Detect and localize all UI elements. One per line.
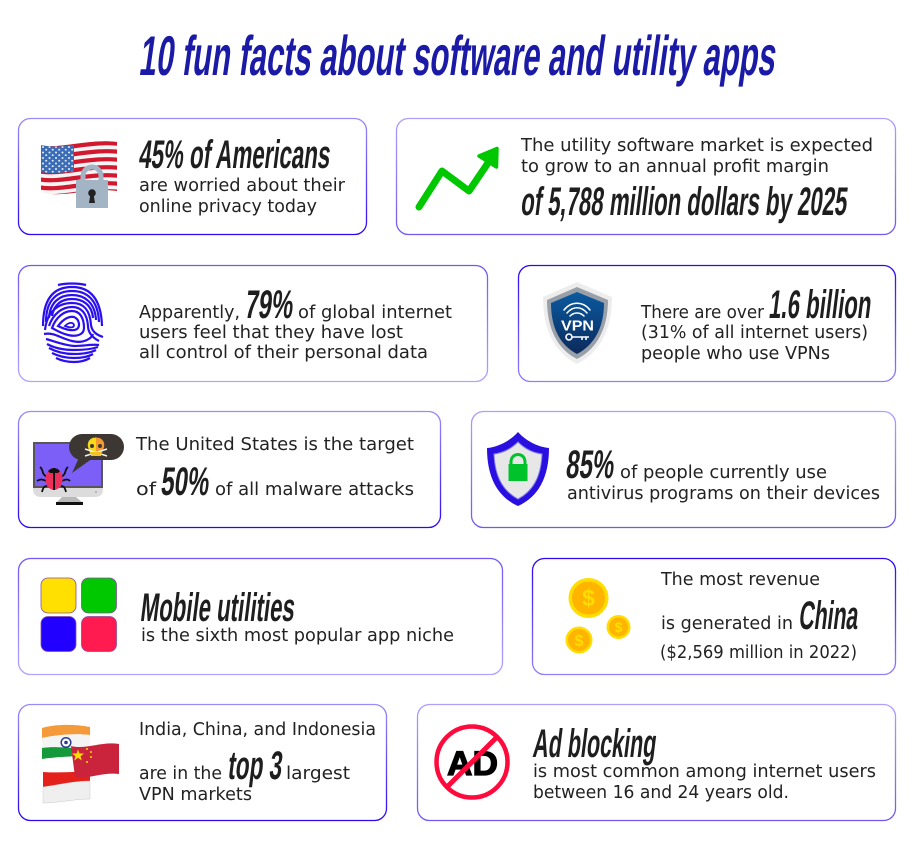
icon: gold coins bbox=[566, 578, 630, 654]
panel: China revenue bbox=[532, 558, 896, 674]
panel: mobile utilities bbox=[18, 558, 502, 674]
text block with 1.6 billion: There are over bbox=[640, 303, 765, 323]
text block with 50%: The United States is the target bbox=[135, 435, 414, 455]
text block with 1.6 billion: (31% of all internet users) bbox=[641, 323, 868, 343]
text block with top 3: VPN markets bbox=[139, 785, 252, 805]
text block: between 16 and 24 years old. bbox=[533, 783, 789, 803]
text block: The utility software market is expected bbox=[520, 136, 873, 156]
panel: Americans privacy bbox=[18, 118, 366, 234]
text block with top 3: largest bbox=[286, 764, 350, 784]
text block with top 3: are in the bbox=[139, 764, 222, 784]
text block bbox=[139, 176, 346, 217]
text block with China: The most revenue bbox=[660, 570, 820, 590]
text block: is most common among internet users bbox=[533, 762, 876, 782]
icon: gold coins: $ bbox=[575, 633, 584, 650]
text block: online privacy today bbox=[139, 197, 317, 217]
text block with 79%: all control of their personal data bbox=[139, 343, 428, 363]
icon: no ads sign bbox=[436, 726, 508, 798]
panel: ad blocking bbox=[418, 704, 896, 820]
text block with 1.6 billion: people who use VPNs bbox=[641, 344, 830, 364]
text block: is the sixth most popular app niche bbox=[141, 626, 454, 646]
icon: gold coins: $ bbox=[582, 585, 595, 611]
panel: top VPN markets bbox=[18, 704, 386, 820]
text block with 79% bbox=[139, 282, 452, 363]
text block with China: is generated in bbox=[661, 614, 793, 634]
icon: VPN shield bbox=[543, 282, 612, 364]
heading: 45% of Americans: 45% of Americans bbox=[137, 132, 333, 177]
text block bbox=[520, 136, 873, 177]
icon: four app tiles bbox=[41, 578, 116, 652]
text block: are worried about their bbox=[139, 176, 346, 196]
icon: VPN shield: VPN bbox=[561, 318, 594, 334]
heading: Ad blocking: Ad blocking bbox=[531, 721, 659, 766]
text block with 50%: of all malware attacks bbox=[215, 480, 414, 500]
text block: to grow to an annual profit margin bbox=[521, 157, 829, 177]
text block with top 3 bbox=[139, 720, 376, 805]
text block with 85% bbox=[564, 442, 880, 504]
heading: Mobile utilities: Mobile utilities bbox=[138, 585, 298, 630]
text block with top 3: top 3 bbox=[226, 743, 285, 788]
icon: no ads sign: AD bbox=[447, 745, 498, 783]
text block with top 3: India, China, and Indonesia bbox=[139, 720, 376, 740]
text block with 85%: antivirus programs on their devices bbox=[567, 484, 880, 504]
icon: antivirus shield bbox=[487, 432, 549, 506]
icon: US flag with padlock bbox=[41, 141, 117, 208]
icon: flags of India, China, Indonesia bbox=[42, 725, 119, 803]
icon: monitor with bug and skull bubble bbox=[33, 434, 124, 505]
text block with 50% bbox=[135, 435, 414, 504]
panel: antivirus bbox=[472, 412, 896, 528]
text block with 79%: of global internet bbox=[298, 303, 452, 323]
text block with 85%: 85% bbox=[564, 442, 617, 487]
panel: VPN users bbox=[518, 266, 896, 382]
text block bbox=[533, 762, 876, 803]
panel: personal data control bbox=[18, 266, 488, 382]
text block with 50%: of bbox=[136, 480, 157, 500]
icon: fingerprint bbox=[43, 284, 103, 362]
panel: malware attacks bbox=[18, 412, 440, 528]
text block with 79%: Apparently, bbox=[139, 303, 240, 323]
icon: green growth arrow bbox=[419, 148, 497, 207]
text block with China bbox=[660, 570, 862, 663]
text block with China: ($2,569 million in 2022) bbox=[660, 643, 857, 663]
text block with 79%: users feel that they have lost bbox=[139, 323, 403, 343]
panel: market growth bbox=[396, 118, 896, 234]
text block with 85%: of people currently use bbox=[620, 463, 827, 483]
text block with China: China bbox=[797, 593, 862, 638]
text block with 50%: 50% bbox=[159, 459, 212, 504]
text block with 79%: 79% bbox=[243, 282, 296, 327]
text block with 1.6 billion bbox=[640, 282, 874, 364]
icon: gold coins: $ bbox=[615, 619, 623, 635]
